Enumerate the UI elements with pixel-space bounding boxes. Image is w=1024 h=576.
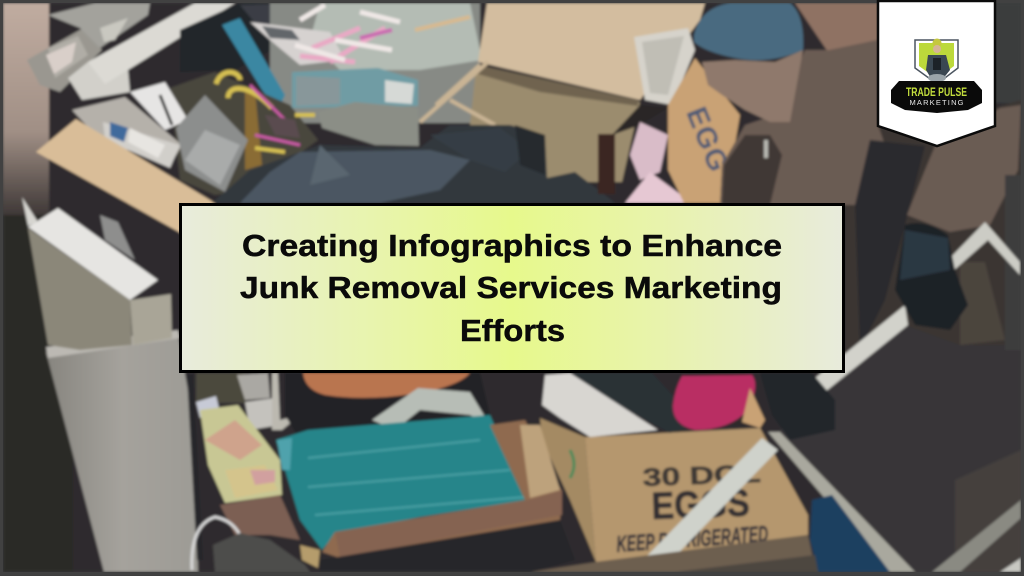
logo banner [891,81,982,113]
brown egg box: EGGS [651,483,750,528]
plastic storage box teal top [292,68,418,108]
title text: Creating Infographics to Enhance [242,228,782,263]
white box left on bin [22,197,172,350]
colourful hangers area [250,3,482,123]
brown egg box [540,418,808,562]
printed text on egg box: 30 DOZ [642,460,761,492]
dark shadow bin right edge [190,375,200,560]
logo wordmark: TRADE PULSE [906,85,967,99]
clear plastic boxes top-left [27,3,150,92]
upper glove [895,223,968,330]
face [702,50,803,122]
dumpster wall left [3,3,49,218]
black bag between [565,373,700,433]
man [694,3,1021,373]
plastic storage box clear bottom [318,102,419,146]
pink knit fabric [673,375,755,430]
white folders [130,82,188,130]
dark furniture leg and pink fabric [612,105,668,135]
blue jeans [810,495,890,572]
small white paper [196,396,220,418]
dark space behind hangers [180,3,310,72]
cardboard box lower [322,420,562,558]
title text [240,228,782,348]
grey waste bin [46,334,198,572]
dark left column [3,215,73,572]
lower glove [760,373,835,440]
olive shadowed cardboard [470,68,640,182]
brown egg box: KEEP REFRIGERATED [616,520,769,557]
white cardboard sheet [68,3,235,100]
wood frame sticks [420,62,495,125]
shield icon with worker [915,38,958,84]
cardboard EGG box side [668,58,740,203]
dark floor [320,520,575,572]
wall behind man [795,3,878,55]
orange fabric [303,373,470,398]
dark area above lid [285,373,490,440]
hat [694,3,803,60]
teal box [222,18,285,110]
floral fabric [200,405,282,503]
teal lid [276,415,527,550]
box green mark [570,450,574,478]
title text: Junk Removal Services Marketing [240,270,782,305]
large cardboard flap left [36,119,215,240]
white cable and dark bag bottom [192,517,240,570]
logo badge [878,1,995,146]
window frame upper [815,305,908,392]
concrete floor strip [530,535,816,572]
title panel [180,204,844,372]
EGG text on box: EGG [680,103,734,177]
hanger pile yellow and pink [170,72,318,195]
brown cloth [220,495,300,540]
zipper [764,140,768,158]
tan cardboard sheet top [478,3,705,100]
white shoe box lid [634,28,695,105]
white box on top of egg box [542,373,658,437]
plastic jars [237,373,300,430]
window frame lower [645,432,1021,572]
jacket [720,40,1021,373]
clear boxes with labels [72,95,248,192]
white pennant [878,1,995,146]
sleeve [907,105,1021,232]
logo subline: MARKETING [910,98,964,107]
black trash bag [212,125,615,203]
plastic wrap [372,388,490,430]
right dark edge [1005,175,1021,350]
panel background [180,204,844,372]
jacket below sleeve [960,262,1005,345]
title text: Efforts [460,313,565,348]
window screen dark mesh [770,325,1021,572]
